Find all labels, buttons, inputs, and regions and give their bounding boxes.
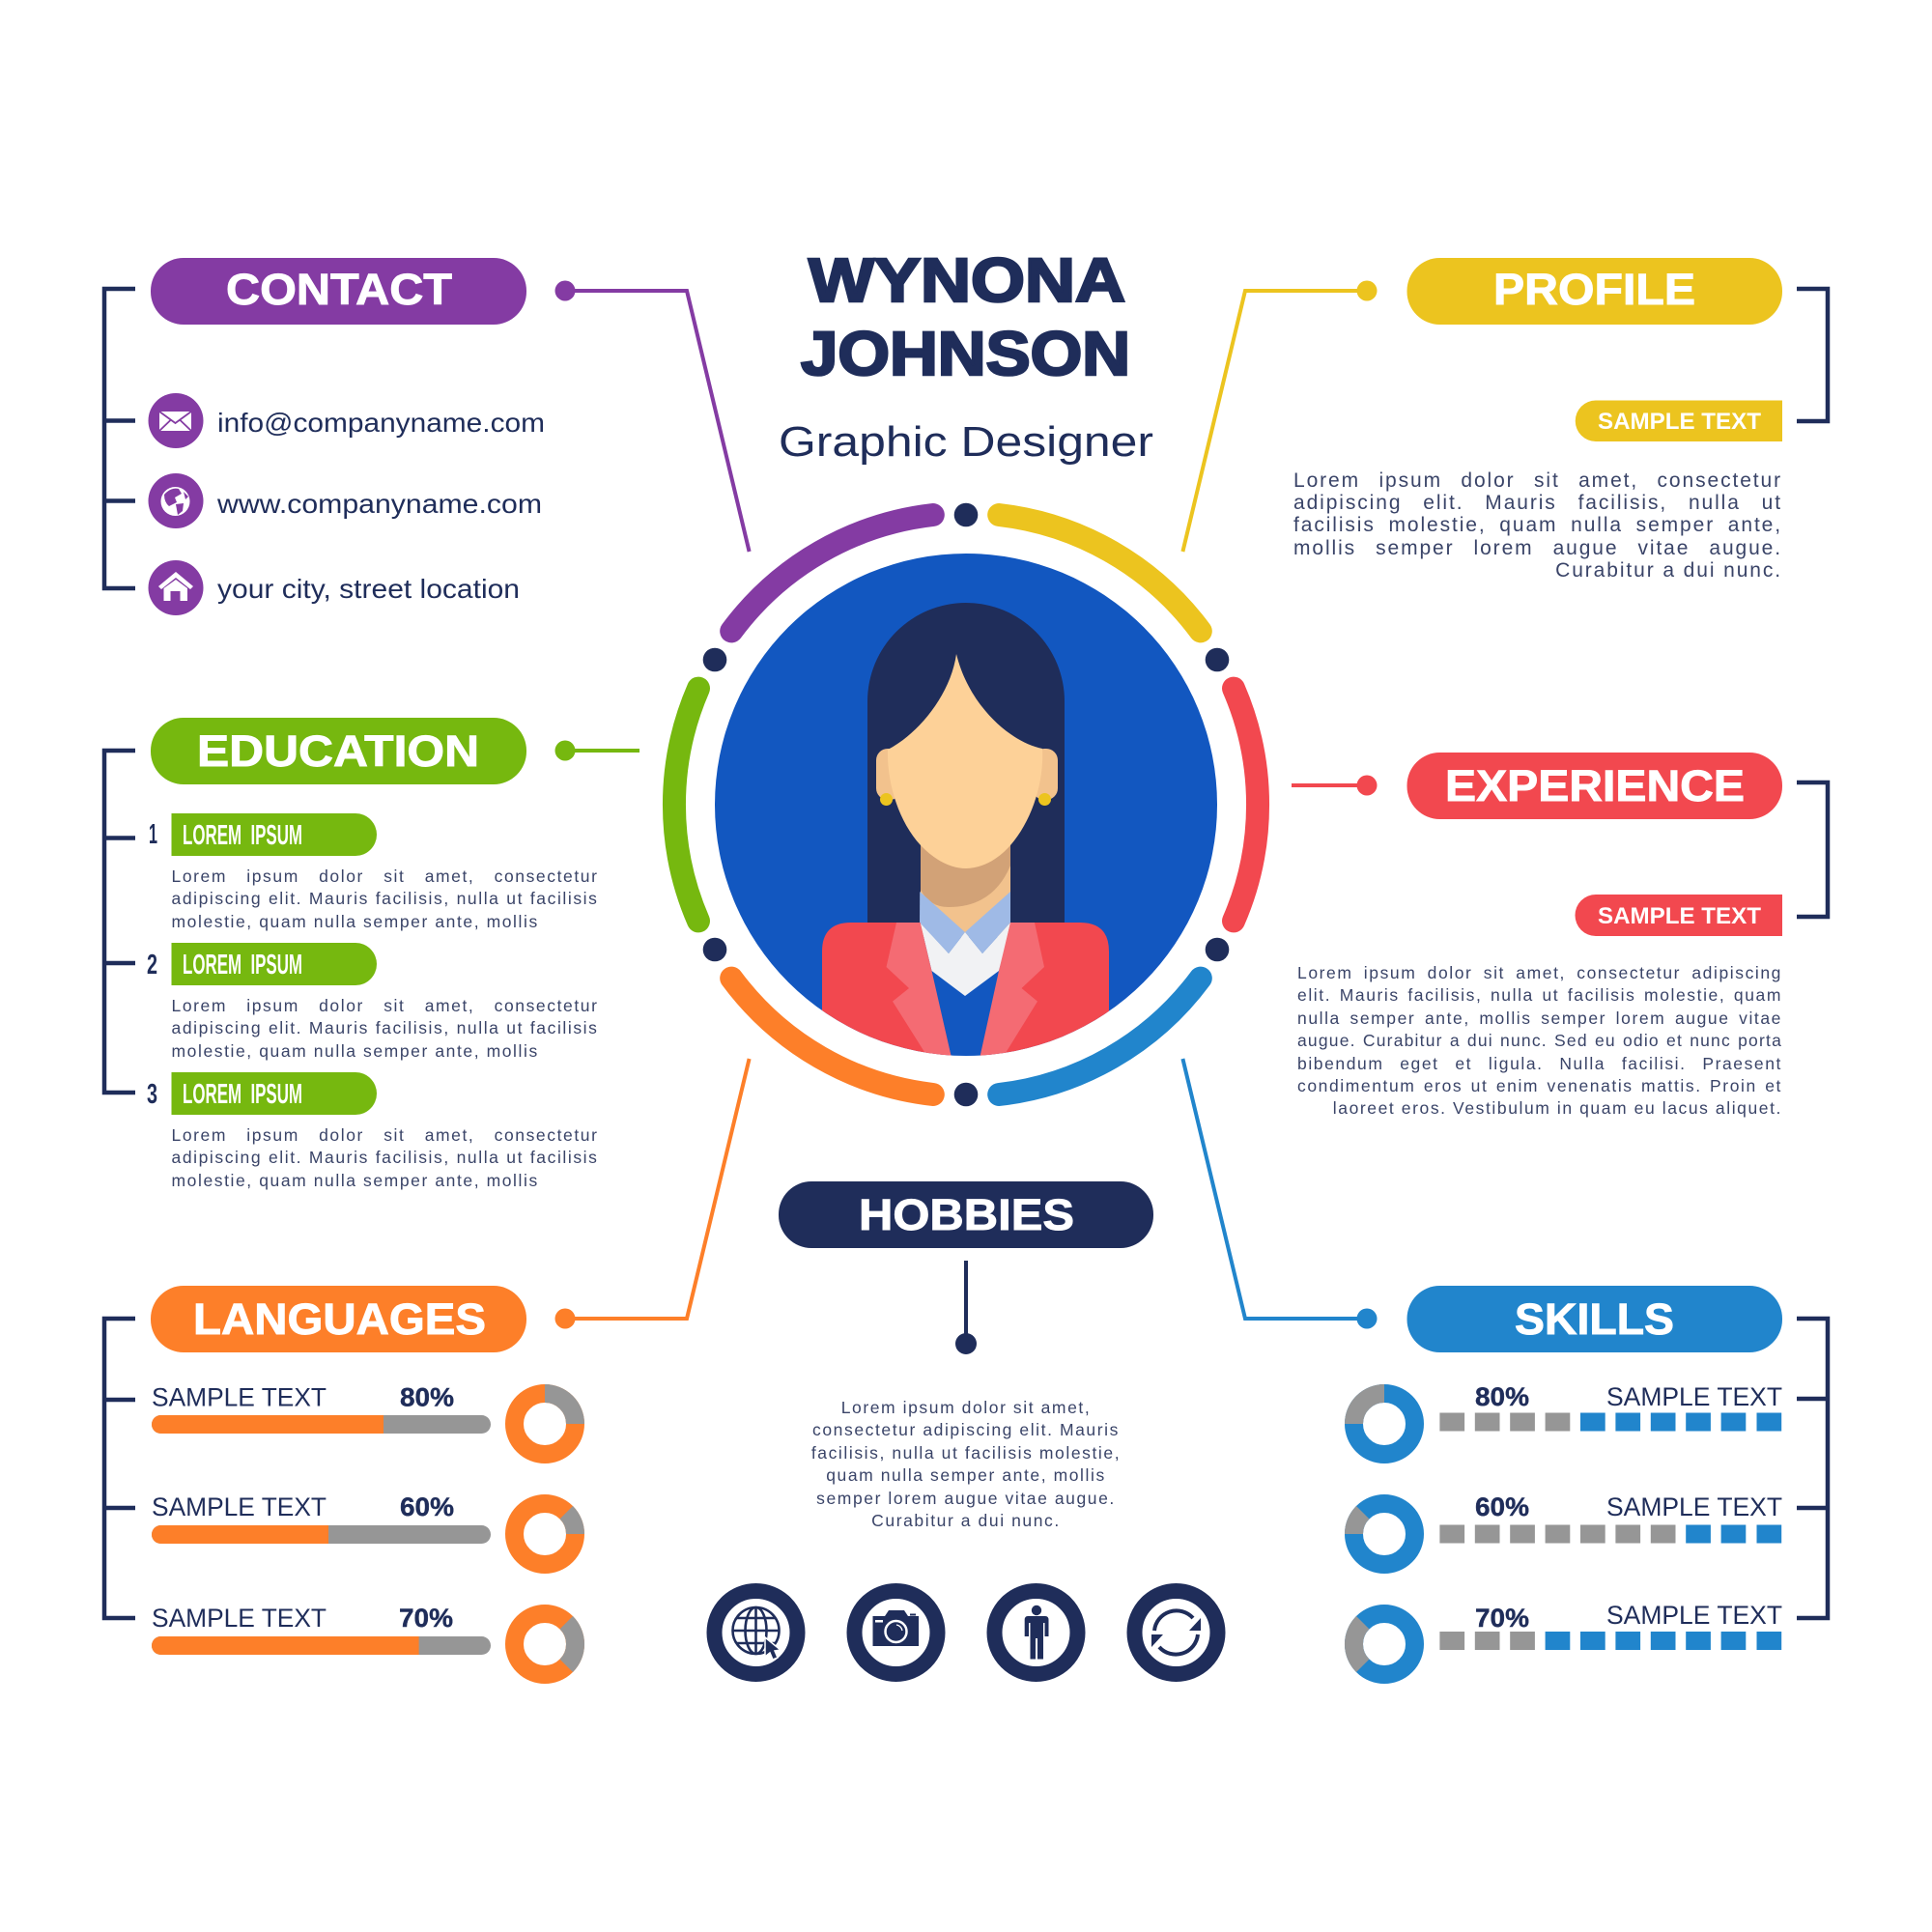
- profile sample text tag: SAMPLE TEXT: [1598, 409, 1761, 435]
- language row 1: SAMPLE TEXT: [152, 1383, 327, 1412]
- bracket: experience: [1797, 782, 1828, 917]
- text block: education item 2: adipiscing elit. Mauris facilisis, nulla ut facilisis: [172, 1018, 599, 1037]
- text block: hobbies: Lorem ipsum dolor sit amet,: [841, 1398, 1091, 1417]
- text block: education item 1: Lorem ipsum dolor sit amet, consectetur: [172, 867, 599, 886]
- text block: hobbies: semper lorem augue vitae augue.: [816, 1489, 1116, 1508]
- heading: experience: [1406, 753, 1782, 819]
- skill row 3: [1353, 1601, 1782, 1675]
- text block: experience: bibendum eget et ligula. Nulla facilisi. Praesent: [1297, 1054, 1782, 1073]
- heading: experience: EXPERIENCE: [1445, 761, 1745, 810]
- text block: education item 1: [172, 867, 599, 931]
- heading: hobbies: [779, 1181, 1153, 1248]
- heading: contact: CONTACT: [226, 265, 452, 314]
- heading: education: [151, 718, 526, 784]
- heading: contact: [151, 258, 526, 325]
- language row 3: 70%: [399, 1604, 453, 1633]
- text block: education item 2: [172, 996, 599, 1061]
- text block: education item 1: adipiscing elit. Mauris facilisis, nulla ut facilisis: [172, 889, 599, 908]
- connector: education: [554, 740, 639, 761]
- language row 2: [152, 1492, 576, 1565]
- heading: languages: [151, 1286, 526, 1352]
- heading: skills: [1406, 1286, 1782, 1352]
- contact: email row: info@companyname.com: [217, 408, 545, 438]
- text block: education item 3: molestie, quam nulla semper ante, mollis: [172, 1171, 539, 1190]
- contact: address row: [149, 560, 520, 615]
- icon: person hobby: [995, 1591, 1078, 1674]
- text block: profile: mollis semper lorem augue vitae augue.: [1293, 537, 1782, 559]
- text block: experience: laoreet eros. Vestibulum in quam eu lacus aliquet.: [1333, 1098, 1782, 1118]
- title: name and job: JOHNSON: [801, 319, 1130, 388]
- text block: experience: nulla semper ante, mollis semper lorem augue vitae: [1297, 1009, 1782, 1028]
- text block: profile: Lorem ipsum dolor sit amet, consectetur: [1293, 469, 1782, 491]
- skill row 2: [1354, 1492, 1782, 1565]
- text block: education item 3: Lorem ipsum dolor sit amet, consectetur: [172, 1125, 599, 1145]
- icon: camera hobby: [854, 1591, 937, 1674]
- text block: experience: [1297, 963, 1782, 1118]
- text block: profile: Curabitur a dui nunc.: [1555, 559, 1782, 582]
- text block: education item 3: adipiscing elit. Mauris facilisis, nulla ut facilisis: [172, 1148, 599, 1167]
- text block: experience: Lorem ipsum dolor sit amet, consectetur adipiscing: [1297, 963, 1782, 982]
- contact: email row: [149, 393, 545, 448]
- text block: experience: condimentum eros ut enim venenatis mattis. Proin et: [1297, 1076, 1782, 1095]
- skill row 3: 70%: [1475, 1604, 1529, 1633]
- skill row 1: [1354, 1382, 1782, 1455]
- heading: hobbies: HOBBIES: [859, 1190, 1074, 1239]
- connector: experience: [1292, 775, 1378, 796]
- ring dots: [703, 503, 1229, 1106]
- text block: hobbies: Curabitur a dui nunc.: [871, 1511, 1061, 1530]
- portrait ring of coloured arcs: [674, 515, 1258, 1094]
- language row 3: SAMPLE TEXT: [152, 1604, 327, 1633]
- text block: education item 2: Lorem ipsum dolor sit amet, consectetur: [172, 996, 599, 1015]
- skill row 3: SAMPLE TEXT: [1606, 1601, 1782, 1630]
- connector: contact: [554, 280, 750, 552]
- education item 1 tag: LOREM IPSUM: [183, 820, 302, 851]
- language row 2: 60%: [400, 1492, 454, 1521]
- text block: education item 1: molestie, quam nulla semper ante, mollis: [172, 912, 539, 931]
- education item 2 tag: 2: [147, 950, 157, 980]
- text block: education item 2: molestie, quam nulla semper ante, mollis: [172, 1041, 539, 1061]
- contact: address row: your city, street location: [217, 574, 520, 604]
- text block: profile: [1293, 469, 1782, 582]
- connector: hobbies: [955, 1261, 977, 1354]
- heading: profile: [1406, 258, 1782, 325]
- bracket: education: [104, 751, 135, 1093]
- heading: languages: LANGUAGES: [193, 1294, 486, 1344]
- language row 1: 80%: [400, 1383, 454, 1412]
- language row 3: [152, 1604, 576, 1675]
- education item 3 tag: LOREM IPSUM: [183, 1079, 302, 1110]
- bracket: contact: [104, 289, 135, 588]
- profile sample text tag: [1576, 400, 1782, 441]
- text block: hobbies: [811, 1398, 1121, 1530]
- bracket: profile: [1797, 289, 1828, 421]
- contact: website row: [149, 473, 542, 528]
- education item 3 tag: 3: [147, 1079, 157, 1110]
- text block: hobbies: quam nulla semper ante, mollis: [826, 1465, 1106, 1485]
- icon: globe hobby: [715, 1591, 798, 1674]
- title: name and job: [779, 245, 1153, 466]
- connector: profile: [1182, 280, 1378, 552]
- text block: education item 3: [172, 1125, 599, 1190]
- text block: experience: augue. Curabitur a dui nunc. Sed eu odio et nunc porta: [1297, 1031, 1782, 1050]
- language row 2: SAMPLE TEXT: [152, 1492, 327, 1521]
- text block: hobbies: consectetur adipiscing elit. Mauris: [812, 1420, 1120, 1439]
- education item 3 tag: [147, 1072, 377, 1115]
- heading: skills: SKILLS: [1515, 1294, 1674, 1344]
- portrait illustration: [715, 554, 1217, 1063]
- education item 1 tag: 1: [149, 819, 157, 850]
- connector: skills: [1182, 1059, 1378, 1329]
- education item 1 tag: [149, 813, 377, 856]
- experience sample text tag: SAMPLE TEXT: [1598, 903, 1761, 929]
- title: name and job: WYNONA: [809, 245, 1125, 315]
- contact: website row: www.companyname.com: [216, 489, 542, 519]
- connector: languages: [554, 1059, 750, 1329]
- education item 2 tag: [147, 943, 377, 985]
- skill row 2: SAMPLE TEXT: [1606, 1492, 1782, 1521]
- title: name and job: Graphic Designer: [779, 418, 1153, 466]
- text block: profile: adipiscing elit. Mauris facilisis, nulla ut: [1293, 492, 1782, 514]
- education item 2 tag: LOREM IPSUM: [183, 950, 302, 980]
- bracket: skills: [1797, 1319, 1828, 1618]
- skill row 1: 80%: [1475, 1382, 1529, 1411]
- heading: profile: PROFILE: [1493, 265, 1695, 314]
- bracket: languages: [104, 1319, 135, 1618]
- icon: sync hobby: [1134, 1591, 1217, 1674]
- experience sample text tag: [1575, 895, 1782, 936]
- skill row 1: SAMPLE TEXT: [1606, 1382, 1782, 1411]
- heading: education: EDUCATION: [197, 726, 479, 776]
- skill row 2: 60%: [1475, 1492, 1529, 1521]
- text block: experience: elit. Mauris facilisis, nulla ut facilisis molestie, quam: [1297, 985, 1782, 1005]
- text block: profile: facilisis molestie, quam nulla semper ante,: [1293, 514, 1782, 536]
- language row 1: [152, 1383, 576, 1455]
- text block: hobbies: facilisis, nulla ut facilisis molestie,: [811, 1443, 1121, 1463]
